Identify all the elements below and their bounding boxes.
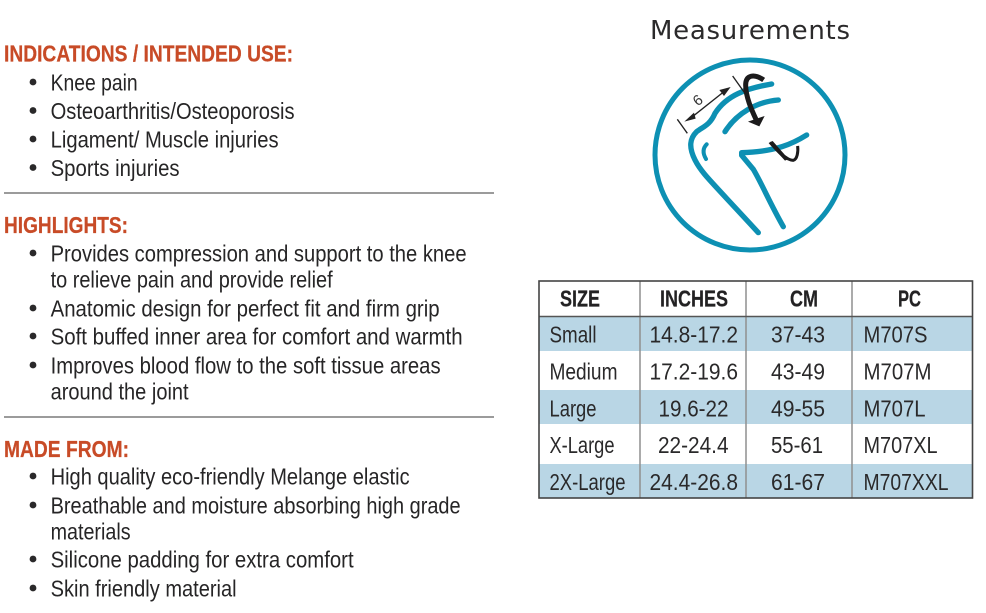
table header: INCHES <box>660 286 728 312</box>
list: highlights: Soft buffed inner area for comfort and warmth <box>51 323 463 349</box>
list: made from <box>30 463 461 601</box>
icon: knee measurement diagram <box>655 60 845 250</box>
table header: PC <box>898 286 921 312</box>
row: small: Small <box>550 322 596 348</box>
row: large: 19.6-22 <box>658 396 728 422</box>
list: indications <box>30 69 295 181</box>
row: 2x-large <box>550 469 948 495</box>
row: medium: 17.2-19.6 <box>650 358 738 384</box>
heading: highlights: HIGHLIGHTS: <box>4 212 128 238</box>
title: measurements: Measurements <box>650 16 850 46</box>
row: medium: 43-49 <box>771 358 825 384</box>
row: large: 49-55 <box>771 396 825 422</box>
list: indications: Ligament/ Muscle injuries <box>51 126 279 152</box>
icon: knee measurement diagram: 6 <box>690 92 707 110</box>
list: highlights: Improves blood flow to the soft tissue areas <box>51 352 441 378</box>
row: small: 37-43 <box>771 322 825 348</box>
list: made from: High quality eco-friendly Melange elastic <box>51 463 410 489</box>
row: 2x-large: 24.4-26.8 <box>650 469 738 495</box>
row: small: 14.8-17.2 <box>650 322 738 348</box>
list: highlights: around the joint <box>51 378 189 404</box>
list: indications: Osteoarthritis/Osteoporosis <box>51 98 295 124</box>
row: x-large: 22-24.4 <box>658 432 728 458</box>
heading: indications: INDICATIONS / INTENDED USE: <box>4 40 293 66</box>
list: indications: Sports injuries <box>51 155 180 181</box>
table: size chart <box>539 281 972 498</box>
row: medium: Medium <box>550 358 618 384</box>
list: highlights: Anatomic design for perfect fit and firm grip <box>51 295 440 321</box>
table header <box>560 286 921 312</box>
row: large: Large <box>550 396 596 422</box>
list: made from: Skin friendly material <box>51 575 237 601</box>
row: medium: M707M <box>864 358 932 384</box>
row: 2x-large: 2X-Large <box>550 469 626 495</box>
list: highlights: to relieve pain and provide relief <box>51 266 333 292</box>
row: small: M707S <box>864 322 928 348</box>
list: made from: Breathable and moisture absorbing high grade <box>51 492 461 518</box>
list: highlights: Provides compression and support to the knee <box>51 240 467 266</box>
row: x-large: 55-61 <box>771 432 823 458</box>
row: 2x-large: M707XXL <box>864 469 948 495</box>
row: x-large: M707XL <box>864 432 938 458</box>
heading: made from: MADE FROM: <box>4 436 129 462</box>
row: large <box>550 396 926 422</box>
section: made from <box>4 436 461 601</box>
list: made from: materials <box>51 518 131 544</box>
list: indications: Knee pain <box>51 69 138 95</box>
row: 2x-large: 61-67 <box>771 469 825 495</box>
table header: CM <box>790 286 818 312</box>
row: small <box>550 322 928 348</box>
table header: SIZE <box>560 286 600 312</box>
row: large: M707L <box>864 396 926 422</box>
row: x-large: X-Large <box>550 432 614 458</box>
row: x-large <box>550 432 938 458</box>
section: indications <box>4 40 295 181</box>
row: medium <box>550 358 932 384</box>
list: made from: Silicone padding for extra comfort <box>51 546 354 572</box>
section: highlights <box>4 212 467 404</box>
list: highlights <box>30 240 467 404</box>
